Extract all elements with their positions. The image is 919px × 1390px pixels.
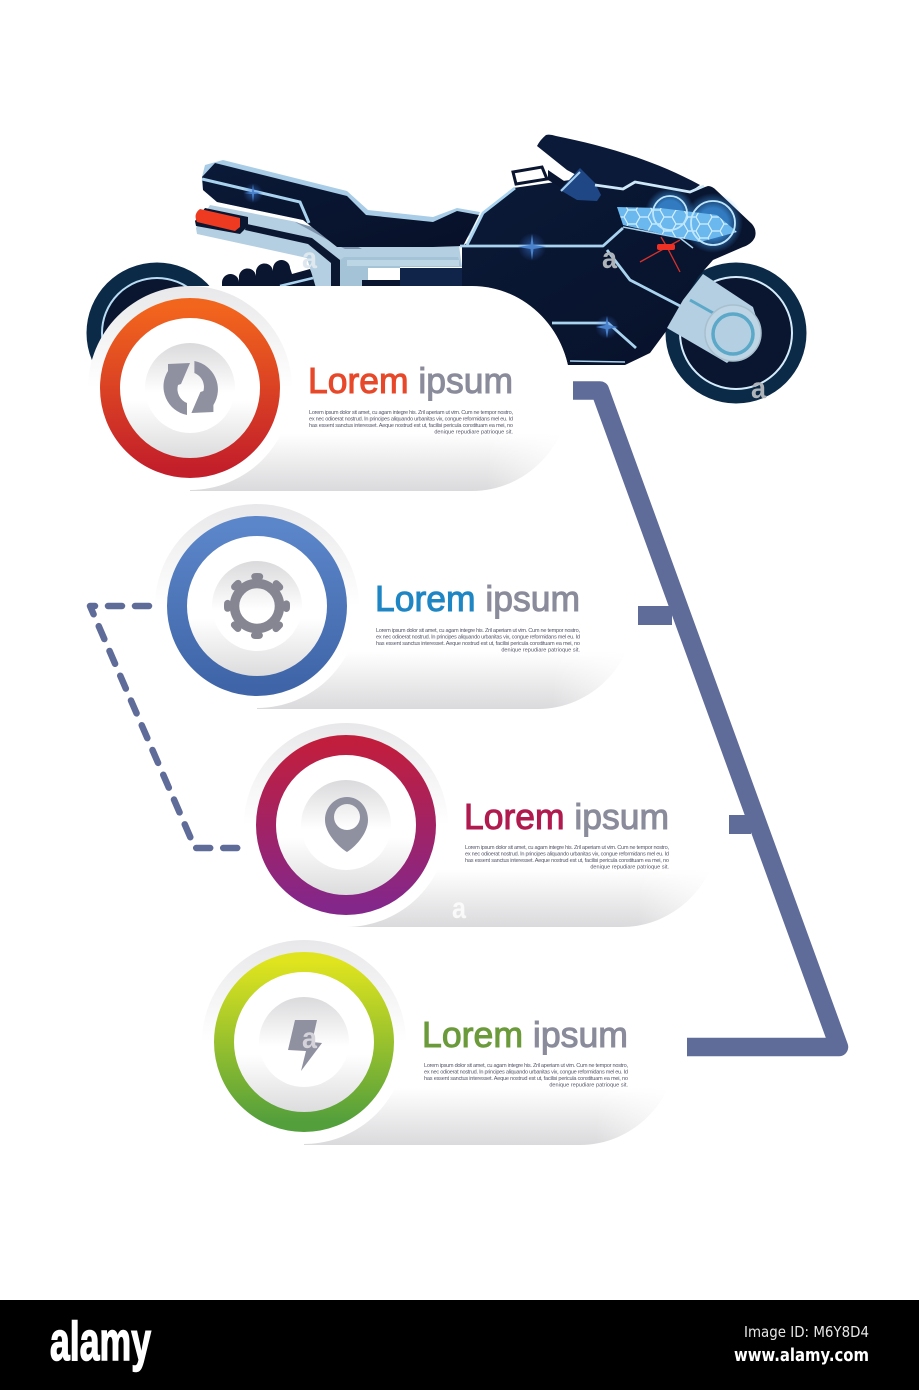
handlebar	[560, 168, 601, 201]
step 4 text: has essent sanctus interesset. Aeque nostrud est ut, facilisi pericula constituam ea mei, no	[424, 1076, 628, 1082]
step 1 text: ex nec odioerat nostrud. In principes aliquando urbanitas vix, congue reformidans mel eu. Id	[309, 416, 513, 422]
step 2 text: has essent sanctus interesset. Aeque nostrud est ut, facilisi pericula constituam ea mei, no	[376, 641, 580, 647]
frame opening	[368, 268, 400, 288]
step 1 text: has essent sanctus interesset. Aeque nostrud est ut, facilisi pericula constituam ea mei, no	[309, 423, 513, 429]
connector bracket	[573, 390, 839, 1047]
footer bar	[0, 1300, 919, 1390]
watermark letters: a	[751, 372, 766, 405]
fuel tank and fairing body	[462, 180, 756, 365]
step 3 panel	[244, 723, 720, 927]
red sparkle	[640, 237, 680, 272]
seat	[202, 160, 480, 247]
step 4 title: Lorem ipsum	[422, 1014, 628, 1055]
step 3 text: denique repudiare patrioque sit.	[590, 864, 669, 870]
step 2 text	[376, 628, 580, 654]
step 2 text: Lorem ipsum dolor sit amet, cu agam integre his. Zril aperiam ut vim. Cum ne tempor nostro,	[376, 628, 580, 634]
bracket stub 2	[638, 606, 672, 625]
step 2 text: denique repudiare patrioque sit.	[501, 648, 580, 654]
headlight	[617, 188, 743, 253]
step 3 text: ex nec odioerat nostrud. In principes aliquando urbanitas vix, congue reformidans mel eu. Id	[465, 852, 669, 858]
watermark letters	[302, 242, 766, 405]
footer logo: alamy	[50, 1310, 151, 1372]
step 1 panel	[88, 286, 570, 491]
step 2 text: ex nec odioerat nostrud. In principes aliquando urbanitas vix, congue reformidans mel eu. Id	[376, 634, 580, 640]
icon: lightning bolt: a	[302, 1022, 317, 1055]
step 3 text: has essent sanctus interesset. Aeque nostrud est ut, facilisi pericula constituam ea mei, no	[465, 858, 669, 864]
step 4 ring	[224, 962, 384, 1122]
step 2 ring	[177, 526, 337, 686]
icon: map pin	[325, 797, 368, 852]
rear wheel	[86, 262, 228, 404]
swingarm and front hub	[667, 274, 761, 363]
step 3 text: Lorem ipsum dolor sit amet, cu agam integre his. Zril aperiam ut vim. Cum ne tempor nostro,	[465, 845, 669, 851]
watermark letters: a	[302, 242, 317, 275]
rear frame and tail	[196, 205, 462, 288]
fairing accent lines	[460, 182, 704, 362]
frame dark strip	[245, 224, 340, 288]
website: www.alamy.com	[734, 1345, 869, 1366]
exhaust fins	[222, 260, 318, 288]
step 1 text	[309, 410, 513, 436]
watermark letters: a	[602, 242, 617, 275]
icon: gear	[228, 576, 286, 636]
step 1 ring	[110, 308, 270, 468]
step 2 title: Lorem ipsum	[375, 578, 580, 619]
dashed connector	[90, 606, 245, 848]
step 4 text	[424, 1063, 628, 1088]
step 4 text: Lorem ipsum dolor sit amet, cu agam integre his. Zril aperiam ut vim. Cum ne tempor nostro,	[424, 1063, 628, 1069]
bracket stub 3	[729, 815, 751, 834]
tail light	[195, 208, 248, 234]
step 4 text: denique repudiare patrioque sit.	[549, 1082, 628, 1088]
step 1 title: Lorem ipsum	[308, 360, 513, 401]
blue sparkles	[243, 183, 619, 339]
mirror	[513, 167, 567, 188]
step 2 panel	[155, 504, 636, 709]
step 3 title: Lorem ipsum	[464, 796, 669, 837]
step 1 text: denique repudiare patrioque sit.	[434, 430, 513, 436]
icon: lightning bolt	[288, 1020, 322, 1071]
step 3 ring	[266, 745, 426, 905]
icon: refresh arrows	[163, 361, 218, 415]
image id: Image ID: M6Y8D4	[744, 1323, 869, 1341]
front wheel	[666, 262, 806, 404]
step 4 panel	[202, 940, 678, 1145]
windshield	[537, 135, 700, 192]
step 4 text: ex nec odioerat nostrud. In principes aliquando urbanitas vix, congue reformidans mel eu. Id	[424, 1070, 628, 1076]
panel watermark: a	[452, 892, 466, 925]
step 1 text: Lorem ipsum dolor sit amet, cu agam integre his. Zril aperiam ut vim. Cum ne tempor nostro,	[309, 410, 513, 416]
step 3 text	[465, 845, 669, 870]
motorcycle illustration	[86, 135, 806, 405]
